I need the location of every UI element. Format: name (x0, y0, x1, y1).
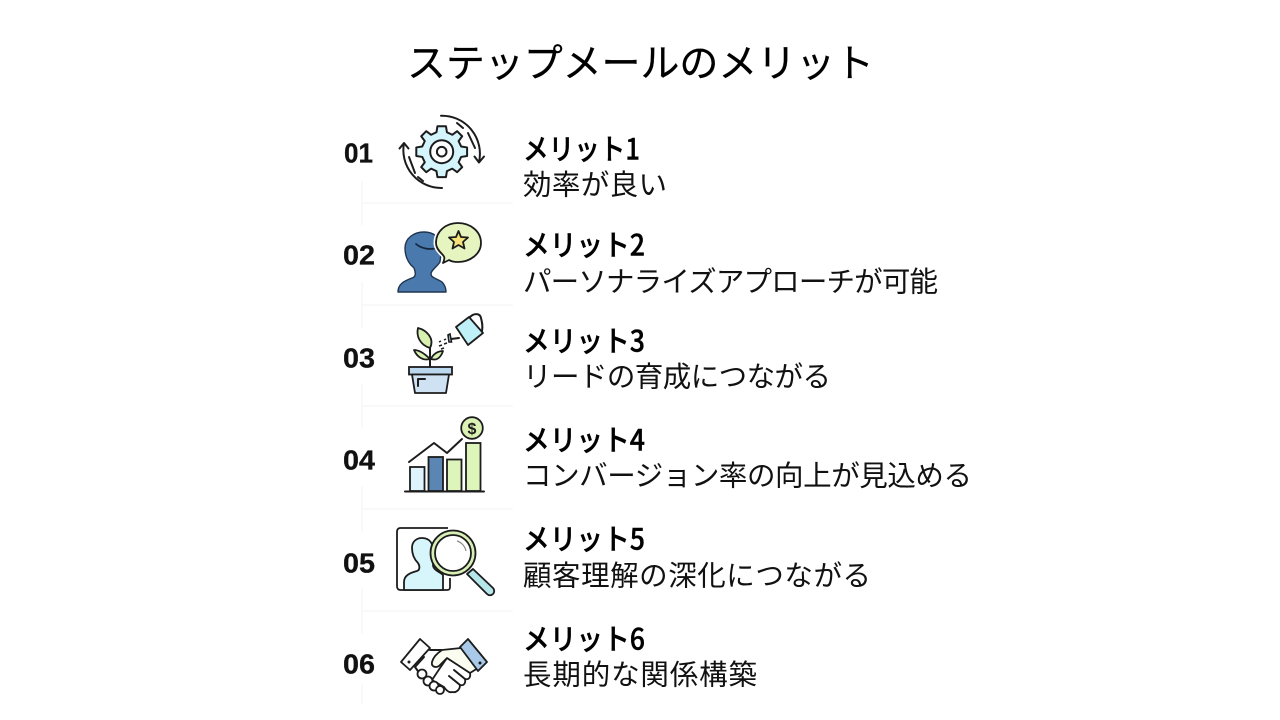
number 06: 06 (343, 648, 375, 680)
icon: handshake (401, 639, 487, 694)
heading: メリット6 (523, 616, 645, 658)
row 5: benefit (343, 516, 871, 595)
heading: メリット5 (523, 516, 645, 558)
row 6: benefit (343, 616, 757, 694)
row 2: benefit (343, 222, 938, 300)
row 4: benefit (343, 417, 972, 494)
icon: person under magnifying glass (397, 528, 494, 595)
number 04: 04 (343, 444, 375, 476)
number 03: 03 (343, 342, 375, 374)
row 3: benefit (343, 314, 831, 396)
description: パーソナライズアプローチが可能 (523, 260, 938, 300)
icon: bar chart with dollar coin (405, 417, 484, 492)
description: 顧客理解の深化につながる (523, 554, 871, 594)
heading: メリット3 (523, 318, 645, 360)
icon: plant and watering can (409, 314, 483, 393)
row 1: benefit (344, 116, 667, 204)
number 01: 01 (344, 138, 373, 168)
description: コンバージョン率の向上が見込める (523, 454, 972, 494)
heading: メリット4 (523, 418, 645, 460)
title: ステップメールのメリット (407, 33, 874, 89)
heading: メリット1 (523, 126, 640, 168)
icon: gear with rotating arrows (400, 116, 484, 188)
description: 効率が良い (523, 162, 667, 204)
description: 長期的な関係構築 (523, 652, 757, 694)
description: リードの育成につながる (523, 354, 831, 396)
heading: メリット2 (523, 222, 645, 264)
icon: bar chart with dollar coin: $ (468, 421, 477, 438)
number 02: 02 (343, 240, 375, 270)
icon: person with speech bubble (398, 223, 481, 292)
number 05: 05 (343, 548, 375, 578)
